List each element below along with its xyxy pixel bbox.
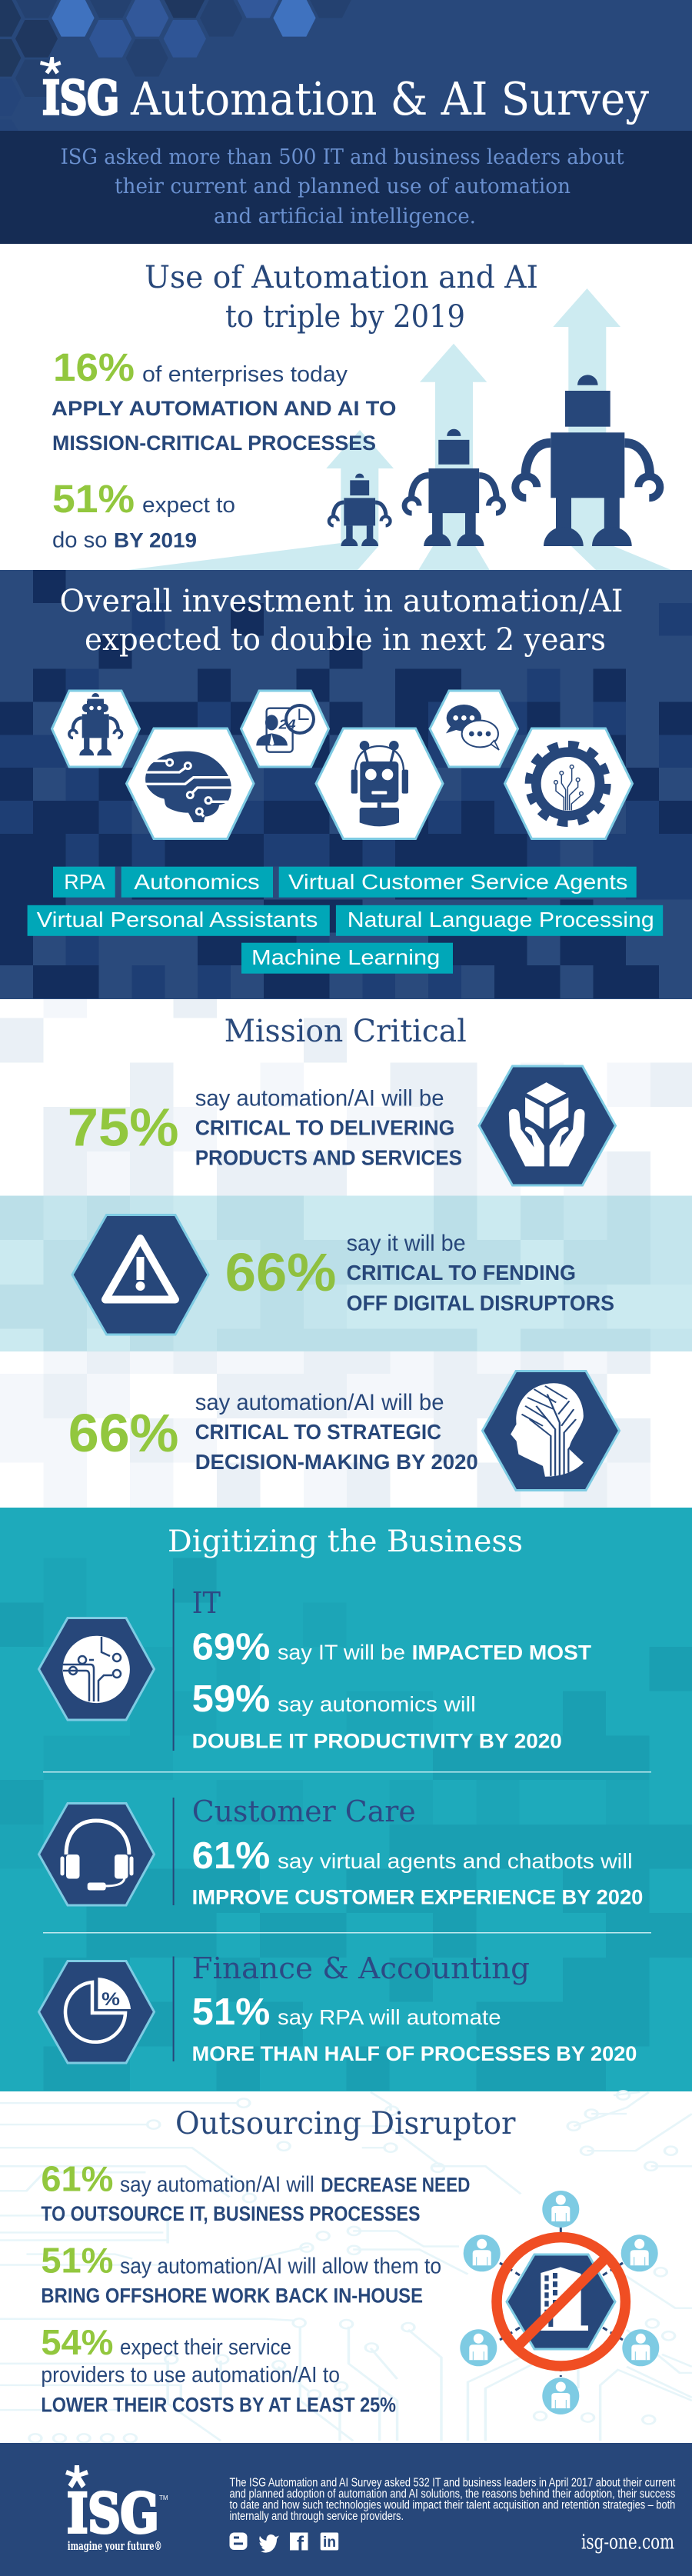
- heading: expected to double in next 2 years: [85, 622, 606, 658]
- section: finance and accounting: Finance & Accounting: [192, 1951, 530, 1985]
- panel: mission critical band: [0, 1195, 692, 1351]
- section: IT: IT: [192, 1586, 221, 1620]
- section: finance and accounting: [173, 1951, 637, 2065]
- divider: [43, 1771, 651, 1772]
- stat: 16%: [52, 345, 397, 455]
- footer ISG logo: TM: [159, 2494, 168, 2501]
- stat: 54%: LOWER THEIR COSTS BY AT LEAST 25%: [41, 2394, 396, 2417]
- icon: facebook: [290, 2532, 308, 2555]
- panel: outsourcing disruptor: [0, 2091, 692, 2443]
- diagram: no outsourcing: [460, 2191, 659, 2414]
- section: IT: [173, 1586, 592, 1752]
- arrows: [128, 288, 671, 570]
- stat: 54%: providers to use automation/AI to: [41, 2363, 340, 2388]
- stat: 66% strategic decision-making: DECISION-MAKING BY 2020: [195, 1450, 478, 1474]
- stat: 51%: 51%: [52, 477, 135, 521]
- header hexagon pattern: [0, 0, 351, 138]
- divider: [43, 1932, 651, 1934]
- heading: to triple by 2019: [225, 299, 465, 335]
- section: IT: say IT will be: [278, 1640, 405, 1665]
- title: Automation & AI Survey: [130, 72, 650, 125]
- tag: Autonomics: Autonomics: [134, 870, 260, 894]
- stat: 16%: of enterprises today: [142, 362, 348, 387]
- stat: 16%: 16%: [53, 345, 135, 389]
- survey note: [229, 2477, 676, 2523]
- stat: 61%: say automation/AI will: [120, 2173, 314, 2198]
- icon: gear with circuit hexagon: [504, 728, 632, 838]
- icon: twitter: [259, 2534, 279, 2553]
- icon: robot hexagon: [52, 691, 140, 767]
- stat: 51%: expect to: [142, 493, 235, 518]
- stat: 66% fending off disruptors: say it will be: [347, 1231, 466, 1256]
- icon: 24 hour agent hexagon: 24: [278, 717, 296, 732]
- stat: 66% fending off disruptors: 66%: [225, 1242, 336, 1302]
- stat: 66% strategic decision-making: say automation/AI will be: [195, 1390, 444, 1415]
- section: IT: DOUBLE IT PRODUCTIVITY BY 2020: [192, 1729, 562, 1752]
- heading: mission critical: Mission Critical: [225, 1014, 467, 1049]
- stat: 51%: do so: [52, 528, 108, 552]
- stat: 75% critical to delivering: 75%: [68, 1097, 178, 1157]
- icon: linkedin: in: [323, 2534, 336, 2551]
- section: customer care: say virtual agents and chatbots will: [278, 1849, 633, 1873]
- tag: Natural Language Processing: [336, 905, 663, 936]
- footer ISG logo: ISG: [67, 2481, 159, 2545]
- stat: 51%: BRING OFFSHORE WORK BACK IN-HOUSE: [41, 2284, 423, 2308]
- heading: Digitizing the Business: [168, 1525, 523, 1559]
- tag: Machine Learning: [241, 943, 453, 974]
- stat: 61%: DECREASE NEED: [321, 2174, 470, 2197]
- icon: bot with headset hexagon: [316, 728, 443, 838]
- icon: blogger: [229, 2532, 248, 2550]
- stat: 66% fending off disruptors: OFF DIGITAL DISRUPTORS: [347, 1291, 614, 1315]
- stat: 75% critical to delivering: CRITICAL TO DELIVERING: [195, 1116, 454, 1140]
- icon: headset: [38, 1803, 154, 1905]
- intro band: ISG asked more than 500 IT and business leaders about: [61, 145, 624, 169]
- tag: RPA: RPA: [64, 870, 105, 894]
- section: IT: 59%: [192, 1678, 270, 1720]
- ISG logo: ISG: [42, 72, 119, 125]
- section: customer care: [173, 1795, 643, 1908]
- stat: 66% strategic decision-making: CRITICAL TO STRATEGIC: [195, 1420, 441, 1444]
- stat: 75% critical to delivering: say automation/AI will be: [195, 1085, 444, 1111]
- heading: Overall investment in automation/AI: [60, 584, 623, 619]
- heading: Use of Automation and AI: [145, 260, 538, 295]
- section: customer care: IMPROVE CUSTOMER EXPERIENCE BY 2020: [192, 1885, 643, 1908]
- stat: 66% strategic decision-making: [68, 1390, 478, 1474]
- panel: footer: [0, 2443, 692, 2576]
- icon: circuit chip: [38, 1618, 154, 1720]
- tag: Virtual Customer Service Agents: Virtual Customer Service Agents: [288, 870, 627, 894]
- icon: 24 hour agent hexagon: [241, 691, 329, 767]
- tag: Virtual Customer Service Agents: [279, 867, 637, 898]
- stat: 66% strategic decision-making: 66%: [68, 1403, 178, 1463]
- stat: 51%: [41, 2241, 441, 2308]
- stat: 54%: [41, 2322, 396, 2417]
- stat: 61%: TO OUTSOURCE IT, BUSINESS PROCESSES: [41, 2202, 421, 2225]
- icon: pie chart with percent: %: [101, 1989, 120, 2010]
- section: finance and accounting: say RPA will automate: [278, 2005, 501, 2029]
- intro band: their current and planned use of automation: [115, 175, 571, 198]
- stat: 66% fending off disruptors: [225, 1231, 614, 1315]
- stat: 51%: 51%: [41, 2241, 114, 2281]
- stat: 51%: say automation/AI will allow them to: [120, 2254, 441, 2278]
- stat: 66% fending off disruptors: CRITICAL TO FENDING: [347, 1261, 576, 1285]
- section: customer care: 61%: [192, 1835, 270, 1877]
- panel: digitizing the business: [0, 1508, 692, 2091]
- section: IT: say autonomics will: [278, 1692, 476, 1716]
- background: pixel pattern: [0, 570, 692, 998]
- tag: Virtual Personal Assistants: Virtual Personal Assistants: [37, 908, 318, 931]
- icon: warning triangle: [72, 1215, 208, 1335]
- stat: 16%: APPLY AUTOMATION AND AI TO: [52, 397, 397, 420]
- heading: [145, 260, 538, 335]
- icon: head with circuit brain: [483, 1371, 620, 1491]
- background: mission critical upper pattern: [0, 974, 692, 1508]
- background: circuit traces: [0, 2091, 692, 2443]
- stat: 75% critical to delivering: PRODUCTS AND SERVICES: [195, 1146, 462, 1170]
- icon: hands holding box: [479, 1066, 615, 1185]
- section: IT: IMPACTED MOST: [412, 1641, 592, 1665]
- stat: 75% critical to delivering: [68, 1085, 462, 1170]
- icon: pie chart with percent: [38, 1961, 154, 2063]
- robot: small: [329, 474, 391, 546]
- survey note: internally and through service providers.: [229, 2510, 404, 2523]
- people: [460, 2191, 659, 2414]
- stat: 54%: 54%: [41, 2322, 114, 2362]
- hexagon with building: [507, 2254, 615, 2349]
- heading: Outsourcing Disruptor: [175, 2106, 516, 2141]
- tag: Autonomics: [121, 867, 273, 898]
- panel: use of automation and AI: [0, 244, 692, 571]
- section: customer care: Customer Care: [192, 1795, 416, 1828]
- prohibition sign: [497, 2238, 625, 2366]
- stat: 61%: [41, 2158, 470, 2225]
- heading: [60, 584, 623, 658]
- icon: circuit brain hexagon: [126, 728, 254, 838]
- panel: investment in automation: [0, 570, 692, 999]
- icon: chat bubbles hexagon: [430, 691, 518, 767]
- intro band: and artificial intelligence.: [214, 205, 476, 228]
- section: IT: 69%: [192, 1626, 270, 1668]
- stat: 51%: [52, 477, 235, 552]
- stat: 51%: BY 2019: [114, 529, 197, 552]
- icon: linkedin: [321, 2532, 338, 2551]
- stat: 16%: MISSION-CRITICAL PROCESSES: [52, 432, 376, 455]
- footer ISG logo: imagine your future®: [68, 2539, 162, 2553]
- ISG logo: [40, 57, 119, 125]
- intro band: [0, 131, 692, 244]
- stat: 61%: 61%: [41, 2158, 114, 2198]
- section: finance and accounting: 51%: [192, 1991, 270, 2033]
- tag: Natural Language Processing: Natural Language Processing: [348, 908, 654, 931]
- background: pixel pattern: [0, 1558, 692, 2091]
- tag: Virtual Personal Assistants: [28, 905, 330, 936]
- stat: 54%: expect their service: [120, 2335, 291, 2360]
- robot: large: [515, 375, 660, 546]
- footer ISG logo: [65, 2465, 168, 2553]
- tag: Machine Learning: Machine Learning: [251, 945, 440, 969]
- icon: facebook: f: [297, 2532, 304, 2555]
- section: finance and accounting: MORE THAN HALF OF PROCESSES BY 2020: [192, 2042, 637, 2065]
- robot: medium: [404, 429, 504, 546]
- tag: RPA: [53, 867, 115, 898]
- header background: [0, 0, 692, 131]
